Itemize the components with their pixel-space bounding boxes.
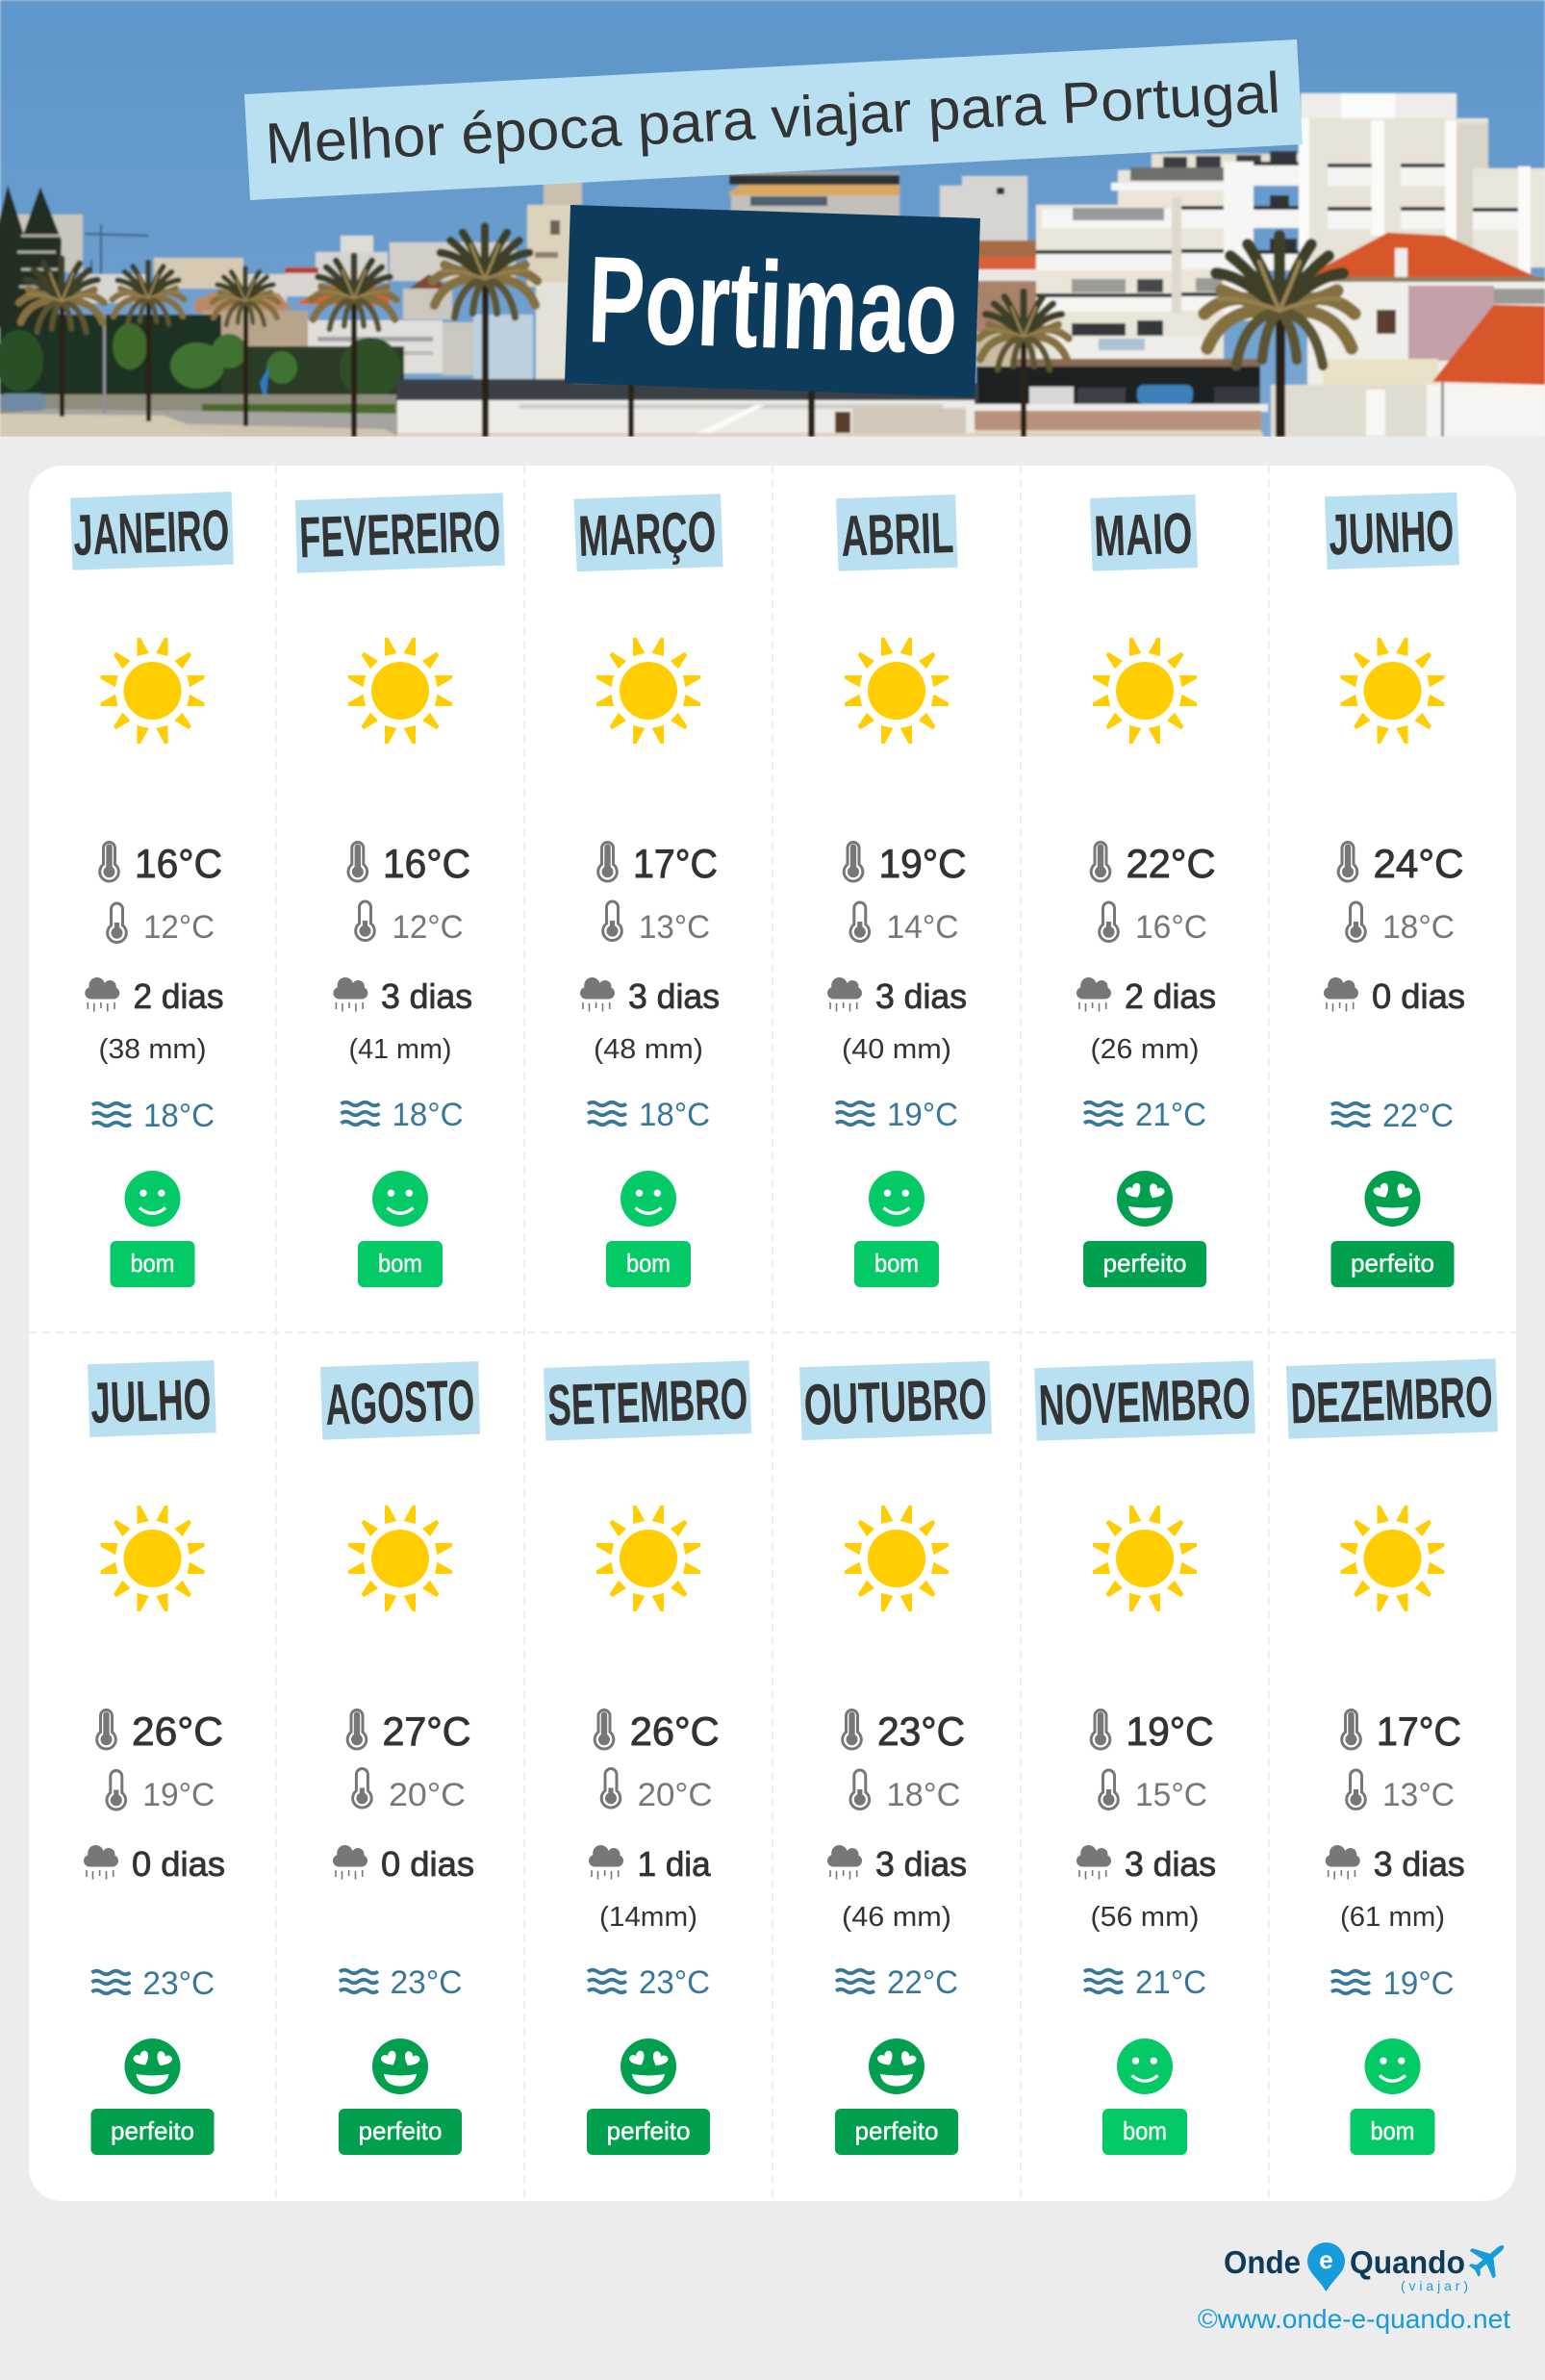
high temperature: 17°C	[1377, 1709, 1461, 1754]
low temperature	[1100, 902, 1207, 946]
rain days: 3 dias	[1125, 1844, 1216, 1884]
sea temperature: 23°C	[639, 1964, 710, 2001]
icon: sun	[1093, 638, 1197, 744]
sea temperature	[1331, 1965, 1455, 2002]
title banner	[244, 39, 1303, 200]
rain days: 1 dia	[638, 1844, 712, 1884]
panel: monthly climate card	[29, 466, 1516, 2201]
month heading: novembro: NOVEMBRO	[1038, 1366, 1252, 1437]
month heading: fevereiro: FEVEREIRO	[298, 498, 501, 570]
high temperature	[100, 841, 222, 886]
month heading: setembro: SETEMBRO	[546, 1366, 748, 1437]
panel: setembro	[544, 1360, 751, 2155]
rating: perfeito: perfeito	[606, 2116, 691, 2145]
rain days	[827, 976, 967, 1016]
month heading: abril	[836, 494, 958, 571]
panel: novembro	[1034, 1360, 1255, 2155]
low temperature: 20°C	[638, 1777, 713, 1813]
rain days: 0 dias	[381, 1844, 474, 1884]
rating: perfeito	[587, 2038, 710, 2155]
rating: perfeito: perfeito	[854, 2116, 939, 2145]
low temperature: 12°C	[143, 909, 215, 946]
month heading: maio	[1090, 494, 1198, 571]
rating: bom: bom	[1123, 2116, 1167, 2145]
low temperature	[353, 1768, 466, 1813]
high temperature	[1091, 1709, 1214, 1754]
panel: agosto	[320, 1361, 480, 2155]
sea temperature: 23°C	[142, 1965, 215, 2002]
high temperature: 19°C	[1126, 1709, 1214, 1754]
low temperature: 13°C	[1382, 1777, 1455, 1813]
panel: maio	[1076, 494, 1216, 1287]
sea temperature	[588, 1097, 710, 1133]
low temperature: 13°C	[639, 909, 710, 946]
rating: perfeito: perfeito	[1102, 1249, 1187, 1278]
icon: sun	[1093, 1506, 1197, 1611]
low temperature	[1347, 902, 1455, 946]
rain days: 2 dias	[133, 976, 223, 1016]
icon: sun	[845, 1506, 949, 1611]
month heading: julho: JULHO	[89, 1367, 212, 1435]
rain days	[580, 976, 720, 1016]
month heading: junho	[1325, 493, 1459, 570]
low temperature: 12°C	[393, 909, 464, 946]
icon: sun	[596, 638, 700, 744]
high temperature: 19°C	[879, 841, 966, 886]
rating: bom: bom	[378, 1249, 422, 1278]
month heading: agosto	[320, 1361, 480, 1440]
low temperature: 16°C	[1135, 909, 1207, 946]
rain days	[827, 1844, 967, 1884]
low temperature: 15°C	[1135, 1777, 1207, 1813]
rain days	[333, 976, 472, 1016]
rating: bom: bom	[131, 1249, 175, 1278]
low temperature: 20°C	[389, 1777, 466, 1813]
rainfall: (26 mm)	[1091, 1034, 1199, 1065]
header photo: Portimao seafront	[0, 0, 1545, 437]
month heading: outubro: OUTUBRO	[803, 1366, 988, 1437]
sea temperature	[340, 1964, 462, 2001]
rain days: 3 dias	[628, 976, 720, 1016]
sea temperature	[1084, 1097, 1206, 1133]
high temperature	[843, 1709, 965, 1754]
sea temperature: 18°C	[143, 1098, 215, 1134]
rating: bom	[1102, 2038, 1187, 2155]
month heading: junho: JUNHO	[1328, 498, 1455, 567]
high temperature: 16°C	[135, 841, 222, 886]
rainfall: (61 mm)	[1340, 1902, 1445, 1933]
sea temperature: 18°C	[393, 1097, 464, 1133]
icon: sun	[596, 1506, 700, 1611]
logo: Onde e Quando viajar: e	[1319, 2245, 1333, 2274]
rain days	[1324, 976, 1465, 1016]
logo: Onde e Quando viajar: Onde	[1224, 2244, 1301, 2280]
sea temperature: 22°C	[887, 1964, 958, 2001]
rating: perfeito	[835, 2038, 958, 2155]
rain days	[333, 1844, 474, 1884]
icon: sun	[100, 638, 204, 744]
month heading: março	[573, 494, 723, 571]
rating: bom	[110, 1171, 194, 1287]
icon: sun	[1341, 1506, 1445, 1611]
sea temperature: 21°C	[1135, 1964, 1206, 2001]
low temperature: 19°C	[142, 1777, 215, 1813]
high temperature: 24°C	[1374, 841, 1464, 886]
month heading: janeiro	[70, 492, 234, 570]
rainfall: (40 mm)	[842, 1034, 951, 1065]
rating: perfeito	[90, 2038, 214, 2155]
rating: bom	[854, 1171, 939, 1287]
rainfall: (38 mm)	[98, 1034, 206, 1065]
rainfall: (14mm)	[599, 1902, 697, 1933]
rain days	[1326, 1844, 1465, 1884]
high temperature	[844, 841, 966, 886]
rain days: 3 dias	[1374, 1844, 1465, 1884]
rating: bom: bom	[1370, 2116, 1414, 2145]
rating: perfeito: perfeito	[1351, 1249, 1434, 1278]
month heading: outubro	[799, 1361, 992, 1440]
rain days	[1076, 976, 1216, 1016]
panel: abril	[827, 494, 967, 1287]
rating: perfeito: perfeito	[111, 2116, 194, 2145]
panel: março	[573, 494, 723, 1287]
panel: fevereiro	[295, 493, 505, 1287]
low temperature	[603, 901, 710, 946]
sea temperature	[836, 1097, 958, 1133]
sea temperature	[1084, 1964, 1206, 2001]
rain days: 0 dias	[1372, 976, 1465, 1016]
month heading: setembro	[544, 1360, 751, 1441]
sea temperature: 23°C	[391, 1964, 462, 2001]
rain days	[85, 976, 223, 1016]
low temperature	[850, 1770, 960, 1813]
month heading: julho	[88, 1360, 216, 1437]
sea temperature: 18°C	[639, 1097, 710, 1133]
rainfall: (56 mm)	[1091, 1902, 1199, 1933]
low temperature	[1100, 1770, 1207, 1813]
low temperature	[356, 901, 464, 946]
high temperature: 26°C	[630, 1709, 720, 1754]
rating: perfeito	[1083, 1171, 1206, 1287]
title banner: Melhor época para viajar para Portugal	[264, 61, 1281, 176]
month heading: agosto: AGOSTO	[324, 1368, 475, 1437]
low temperature: 18°C	[887, 1777, 960, 1813]
month heading: novembro	[1034, 1360, 1255, 1441]
icon: sun	[348, 1506, 452, 1611]
month heading: maio: MAIO	[1093, 500, 1193, 569]
month heading: março: MARÇO	[577, 499, 717, 569]
high temperature: 16°C	[383, 841, 470, 886]
low temperature: 14°C	[887, 909, 958, 946]
sea temperature: 21°C	[1135, 1097, 1206, 1133]
high temperature: 23°C	[877, 1709, 965, 1754]
sea temperature	[92, 1098, 215, 1134]
high temperature: 27°C	[383, 1709, 471, 1754]
icon: sun	[1341, 638, 1445, 744]
sea temperature	[588, 1964, 710, 2001]
sea temperature	[836, 1964, 958, 2001]
sea temperature	[92, 1965, 215, 2002]
low temperature	[108, 903, 215, 946]
month heading: fevereiro	[295, 493, 505, 573]
low temperature	[601, 1768, 713, 1813]
low temperature	[1347, 1770, 1455, 1813]
rating: bom: bom	[626, 1249, 671, 1278]
logo: Onde e Quando viajar: (viajar)	[1401, 2278, 1468, 2293]
rain days	[589, 1844, 712, 1884]
sea temperature: 22°C	[1382, 1098, 1454, 1134]
panel: junho	[1324, 493, 1465, 1287]
sea temperature: 19°C	[1383, 1965, 1455, 2002]
rain days: 3 dias	[875, 1844, 967, 1884]
rain days: 2 dias	[1125, 976, 1216, 1016]
month heading: abril: ABRIL	[840, 500, 954, 569]
logo: Onde e Quando viajar: Quando	[1350, 2244, 1465, 2280]
high temperature: 26°C	[132, 1709, 223, 1754]
rain days	[84, 1844, 225, 1884]
low temperature: 18°C	[1382, 909, 1455, 946]
logo: Onde e Quando viajar	[1224, 2232, 1515, 2293]
panel: julho	[84, 1360, 225, 2155]
city name panel: Portimao	[586, 231, 960, 381]
icon: sun	[845, 638, 949, 744]
high temperature	[1342, 1709, 1461, 1754]
month heading: janeiro: JANEIRO	[72, 497, 230, 568]
sea temperature	[1331, 1098, 1454, 1134]
rain days: 3 dias	[875, 976, 967, 1016]
high temperature: 22°C	[1126, 841, 1216, 886]
rating: perfeito: perfeito	[358, 2116, 443, 2145]
high temperature	[598, 841, 718, 886]
sea temperature: 19°C	[887, 1097, 958, 1133]
city name panel	[565, 205, 980, 397]
rating: bom	[606, 1171, 691, 1287]
low temperature	[850, 902, 958, 946]
icon: sun	[348, 638, 452, 744]
rating: perfeito	[1331, 1171, 1455, 1287]
panel: dezembro	[1286, 1358, 1498, 2155]
icon: sun	[100, 1506, 204, 1611]
rain days	[1076, 1844, 1216, 1884]
panel: janeiro	[70, 492, 234, 1287]
rainfall: (48 mm)	[594, 1034, 703, 1065]
rain days: 0 dias	[132, 1844, 225, 1884]
rating: bom: bom	[874, 1249, 919, 1278]
website credit: ©www.onde-e-quando.net	[1198, 2304, 1510, 2334]
rainfall: (41 mm)	[348, 1034, 452, 1065]
low temperature	[107, 1770, 215, 1813]
high temperature: 17°C	[633, 841, 718, 886]
sea temperature	[341, 1097, 464, 1133]
rating: bom	[358, 1171, 443, 1287]
panel: outubro	[799, 1361, 992, 2155]
rating: bom	[1351, 2038, 1435, 2155]
rain days: 3 dias	[381, 976, 472, 1016]
rainfall: (46 mm)	[842, 1902, 951, 1933]
rating: perfeito	[339, 2038, 462, 2155]
